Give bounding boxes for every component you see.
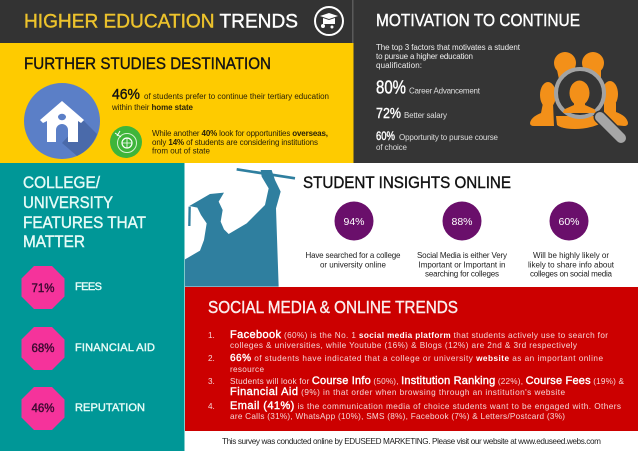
text: overseas paragraph: While another 40% look for opportunities overseas, [152,129,328,138]
list item 1 [208,329,608,350]
heading: FEATURES THAT [23,214,146,232]
stat: 60% share on social media: 60% [558,216,580,228]
stat: 88% social media importance: Important or Important in [418,260,506,270]
list item 1: 1. [208,331,215,340]
stat: opportunity: 60% [376,131,395,143]
stat: 88% social media importance: searching for colleges [425,270,499,278]
text: intro [376,43,521,70]
heading: STUDENT INSIGHTS ONLINE [303,173,511,192]
feature: fees [22,266,102,309]
stat: better salary: Better salary [404,111,447,120]
stat: home state: 46% [112,86,140,103]
stat: 60% share on social media: likely to share info about [528,260,615,270]
list item 1: colleges & universities, while Youtube (16%) & Blogs (12%) are 2nd & 3rd respectively [230,341,578,350]
stat: 60% share on social media [528,202,615,278]
list item 4: Email (41%) is the communication media of choice students want to be engaged with. Others [230,400,621,412]
list item 2: 66% of students have indicated that a college or university website as an important online [230,353,603,364]
feature: reputation: 46% [32,401,55,415]
heading: UNIVERSITY [23,194,113,212]
stat: 60% share on social media: Will be highly likely or [533,251,609,260]
icon: graduation cap badge [315,7,343,35]
text: intro: to pursue a higher education [376,52,473,61]
icon: people under magnifying glass [530,52,628,138]
stat: 88% social media importance: 88% [451,216,473,228]
text: overseas paragraph: only 14% of students are considering institutions [152,138,318,147]
panel: student insights online [185,163,638,287]
stat: opportunity [376,131,499,152]
stat: 94% searched online: or university online [320,260,387,270]
heading: SOCIAL MEDIA & ONLINE TRENDS [208,297,458,317]
feature: reputation: REPUTATION [75,402,145,414]
list item 2: 2. [208,354,215,363]
title: HIGHER EDUCATION TRENDS [24,10,298,32]
footer note: This survey was conducted online by EDUSEED MARKETING. Please visit our website at www.eduseed.webs.com [222,437,601,446]
stat: 94% searched online: Have searched for a college [306,251,401,260]
text: home state description: of students prefer to continue their tertiary education [144,92,329,101]
list item 3: 3. [208,377,215,386]
text: intro: The top 3 factors that motivates a student [376,43,521,52]
feature: financial aid: FINANCIAL AID [75,342,155,354]
stat: 94% searched online: 94% [343,216,365,228]
text: intro: qualification: [376,61,422,70]
text: home state second line: within their home state [111,103,194,112]
stat: 88% social media importance: Social Media is either Very [417,251,507,260]
stat: career advancement [376,78,481,98]
list item 2 [208,353,603,374]
list item 4 [208,400,621,421]
stat: opportunity: of choice [376,143,408,152]
heading: MATTER [23,233,85,251]
feature: reputation [22,387,145,430]
stat: career advancement: 80% [376,78,406,98]
feature: fees: 71% [32,281,55,295]
feature: financial aid: 68% [32,341,55,355]
feature: financial aid [22,327,155,370]
panel: social media and online trends [185,287,638,431]
panel: further studies destination [0,43,352,163]
stat: better salary [376,105,447,122]
heading: MOTIVATION TO CONTINUE [376,10,580,30]
panel: higher education trends header [0,0,352,43]
heading [23,174,146,251]
heading: FURTHER STUDIES DESTINATION [24,54,271,73]
stat: opportunity: Opportunity to pursue course [399,133,499,142]
illustration: graduate silhouette [185,169,295,287]
feature: fees: FEES [75,281,102,293]
list item 4: 4. [208,402,215,411]
text: overseas paragraph: from out of state [152,146,211,156]
stat: 94% searched online [306,202,401,270]
heading: COLLEGE/ [23,174,100,192]
list item 3 [208,375,625,398]
list item 4: are Calls (31%), WhatsApp (10%), SMS (8%), Facebook (7%) & Letters/Postcard (3%) [230,412,565,421]
text: overseas paragraph [152,129,328,156]
list item 3: Students will look for Course Info (50%), Institution Ranking (22%), Course Fees (19%) & [230,375,625,387]
stat: career advancement: Career Advancement [409,86,481,96]
stat: 88% social media importance [417,202,507,278]
icon: home in blue circle [24,83,100,159]
list item 2: resource [230,365,264,374]
panel: college university features [0,163,184,451]
panel: motivation to continue [352,0,638,163]
icon: green globe [110,126,142,158]
list item 1: Facebook (60%) is the No. 1 social media platform that students actively use to search for [230,329,608,341]
stat: better salary: 72% [376,105,401,122]
list item 3: Financial Aid (9%) in that order when browsing through an institution's website [230,386,565,398]
stat: 60% share on social media: colleges on social media [530,270,613,278]
